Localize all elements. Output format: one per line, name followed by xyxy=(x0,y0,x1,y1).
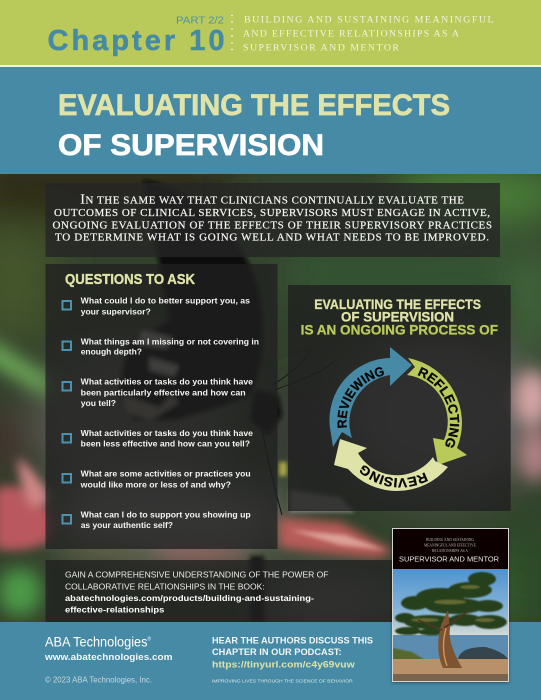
chapter number: Chapter 10 xyxy=(48,25,224,57)
question 3: you tell? xyxy=(81,398,116,408)
panel: intro statement: IN THE SAME WAY THAT CLINICIANS CONTINUALLY EVALUATE THE xyxy=(80,191,464,206)
book title xyxy=(424,538,477,553)
question 3: What activities or tasks do you think have xyxy=(81,377,253,387)
chapter title: BUILDING AND SUSTAINING MEANINGFUL xyxy=(244,15,494,26)
question 5 xyxy=(62,469,251,489)
questions heading: QUESTIONS TO ASK xyxy=(65,272,195,288)
title band: OF SUPERVISION xyxy=(58,129,324,162)
podcast callout: CHAPTER IN OUR PODCAST: xyxy=(212,647,342,657)
header band xyxy=(0,0,541,67)
panel: book promo text: abatechnologies.com/products/building-and-sustaining- xyxy=(65,593,314,603)
chapter title xyxy=(243,15,494,54)
panel heading: IS AN ONGOING PROCESS OF xyxy=(301,322,498,337)
question 6: as your authentic self? xyxy=(81,520,173,530)
arrow: reviewing: REVIEWING xyxy=(337,367,384,428)
question 4: What activities or tasks do you think have xyxy=(81,428,253,438)
question 6: What can I do to support you showing up xyxy=(81,509,251,519)
panel heading: OF SUPERVISION xyxy=(341,310,454,324)
book cover xyxy=(392,528,509,682)
question 2 xyxy=(62,336,259,357)
question 4 xyxy=(62,428,253,449)
arrow: revising: REVISING xyxy=(360,466,428,488)
book photo: tree xyxy=(393,569,508,682)
panel heading: EVALUATING THE EFFECTS xyxy=(314,297,481,312)
question 1 xyxy=(62,296,250,316)
question 4: been less effective and how can you tell? xyxy=(81,439,250,449)
question 6 xyxy=(62,509,251,530)
question 2: What things am I missing or not covering in xyxy=(81,336,259,346)
copyright: © 2023 ABA Technologies, Inc. xyxy=(45,676,152,685)
butterfly wing xyxy=(118,180,282,435)
question 2: enough depth? xyxy=(81,347,142,357)
background photo: butterfly on flower xyxy=(0,160,541,630)
panel heading xyxy=(301,297,498,337)
dotted separator xyxy=(231,15,233,50)
question 1: What could I do to better support you, as xyxy=(81,296,250,306)
panel: intro statement xyxy=(46,183,500,257)
panel: questions to ask xyxy=(46,264,278,549)
panel: book promo text: GAIN A COMPREHENSIVE UNDERSTANDING OF THE POWER OF xyxy=(65,571,328,580)
panel: book promo text: COLLABORATIVE RELATIONSHIPS IN THE BOOK: xyxy=(65,582,265,591)
panel: book promo text: effective-relationships xyxy=(65,605,165,615)
chapter title: SUPERVISOR AND MENTOR xyxy=(243,43,399,54)
question 1: your supervisor? xyxy=(81,306,151,316)
arrow: reflecting: REFLECTING xyxy=(418,366,460,448)
website: www.abatechnologies.com xyxy=(44,652,172,662)
panel: ongoing process cycle xyxy=(288,285,511,511)
panel: intro statement: OUTCOMES OF CLINICAL SERVICES, SUPERVISORS MUST ENGAGE IN ACTIVE, xyxy=(54,207,490,219)
tagline: IMPROVING LIVES THROUGH THE SCIENCE OF BEHAVIOR xyxy=(212,678,353,683)
title band xyxy=(0,67,541,174)
question 5: What are some activities or practices you xyxy=(81,469,251,479)
podcast callout xyxy=(212,635,373,671)
arrow: reflecting xyxy=(407,358,467,464)
book cover: SUPERVISOR AND MENTOR xyxy=(399,554,499,564)
footer band xyxy=(0,622,541,700)
question 5: would like more or less of and why? xyxy=(80,479,231,489)
podcast callout: https://tinyurl.com/c4y69vuw xyxy=(212,660,355,671)
question 3: been particularly effective and how can xyxy=(81,387,246,397)
panel: intro statement: TO DETERMINE WHAT IS GOING WELL AND WHAT NEEDS TO BE IMPROVED. xyxy=(55,232,489,244)
arrow: revising xyxy=(334,439,448,491)
logo: ABA Technologies xyxy=(45,635,154,650)
panel: intro statement: ONGOING EVALUATION OF THE EFFECTS OF THEIR SUPERVISORY PRACTICES xyxy=(52,219,492,231)
main heading: EVALUATING THE EFFECTS xyxy=(58,89,450,122)
question 3 xyxy=(62,377,253,408)
book title: MEANINGFUL AND EFFECTIVE xyxy=(424,544,477,548)
chapter title: AND EFFECTIVE RELATIONSHIPS AS A xyxy=(243,29,460,40)
book title: RELATIONSHIPS AS A xyxy=(432,549,468,553)
book title: BUILDING AND SUSTAINING xyxy=(426,538,474,542)
logo: ® xyxy=(148,636,151,643)
arrow: reviewing xyxy=(330,347,412,447)
podcast callout: HEAR THE AUTHORS DISCUSS THIS xyxy=(212,635,373,645)
panel: book promo text xyxy=(46,560,396,622)
part label: PART 2/2 xyxy=(176,14,224,26)
